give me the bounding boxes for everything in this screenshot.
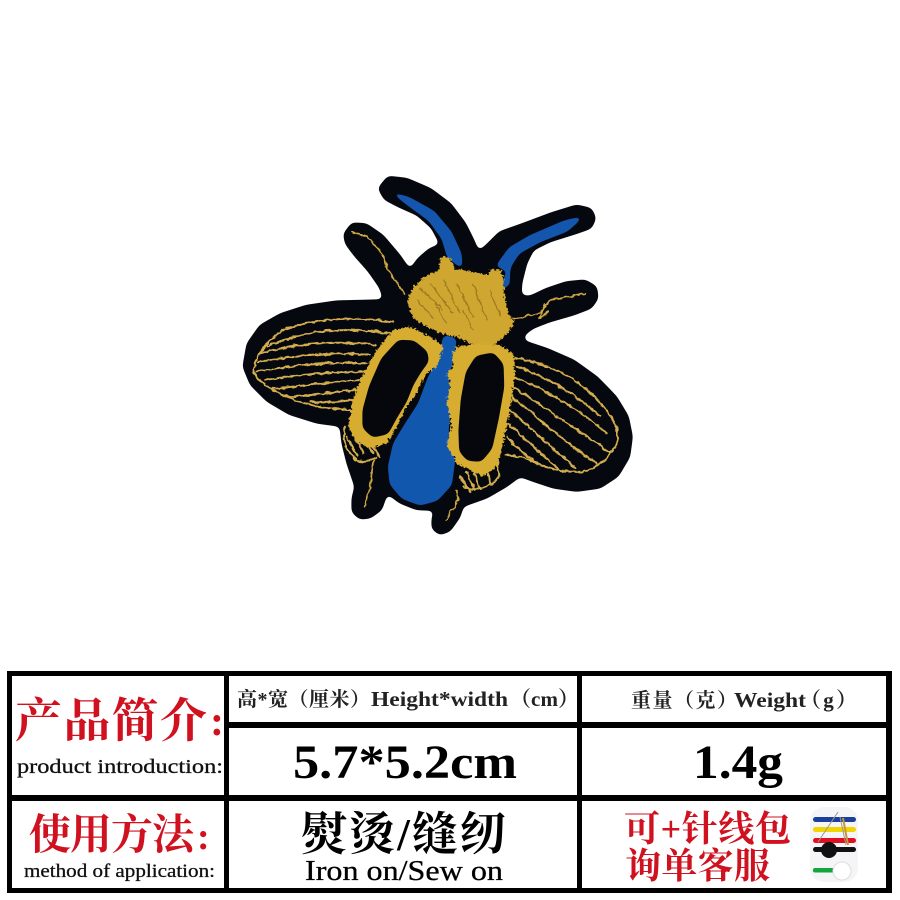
header: weight: [631, 688, 857, 712]
note: ask customer service: 询单客服: [625, 846, 770, 886]
heading: method of application: 使用方法: [29, 812, 197, 859]
antennae blue: [387, 190, 585, 289]
embroidered bee patch: [244, 177, 631, 534]
label: product introduction English: product introduction:: [17, 756, 223, 778]
value: iron or sew English: Iron on/Sew on: [305, 855, 504, 887]
header: weight: （g）: [800, 688, 857, 712]
heading: product introduction: 产品简介: [15, 696, 207, 748]
note: sewing kit offer: 可+针线包: [624, 809, 791, 849]
value: iron or sew Chinese: 熨烫/缝纫: [301, 809, 506, 860]
right wing cover: [447, 343, 515, 477]
thorax gold: [407, 256, 514, 345]
abdomen blue: [388, 335, 457, 505]
header: weight: 重量（克）: [631, 688, 737, 712]
heading: product introduction: :: [210, 699, 224, 745]
right wing black spot: [459, 353, 504, 462]
patch black backing: [244, 177, 631, 534]
header: weight: Weight: [734, 688, 806, 712]
icon: sewing kit: [810, 807, 858, 882]
value: weight: 1.4g: [693, 736, 783, 789]
left wing: [254, 319, 393, 461]
spec table: [7, 671, 892, 893]
table grid lines: [7, 671, 892, 893]
left wing black spot: [363, 340, 429, 437]
heading: method of application: :: [197, 816, 210, 858]
right wing: [460, 358, 618, 492]
left wing cover: [348, 327, 443, 448]
header: height and width: Height*width: [371, 687, 508, 711]
header: height and width: （cm）: [510, 687, 579, 711]
back legs gold thread: [352, 232, 585, 520]
header: height and width: [237, 687, 579, 711]
value: size: 5.7*5.2cm: [293, 736, 517, 789]
thorax stitch texture: [417, 280, 500, 330]
header: height and width: 高*宽（厘米）: [237, 687, 370, 711]
label: method of application English: method of application:: [24, 861, 215, 882]
